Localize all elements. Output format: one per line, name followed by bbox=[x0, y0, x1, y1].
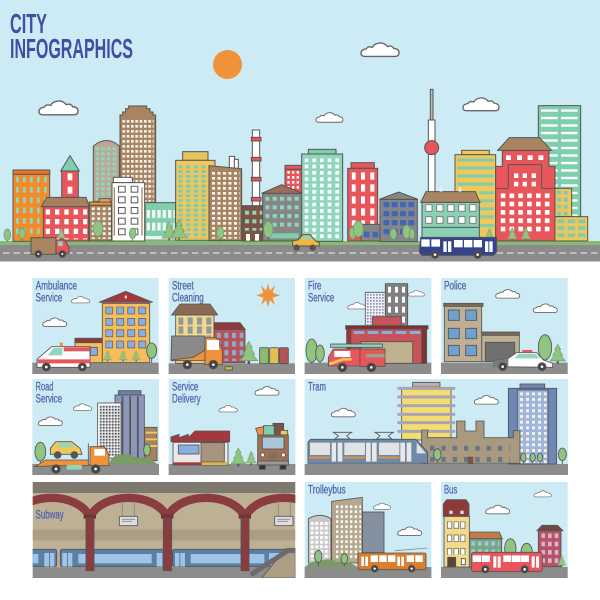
trees and pines bbox=[4, 219, 273, 242]
panel: trolleybus bbox=[305, 482, 431, 578]
bottom row panels: trolleybus and bus bbox=[305, 482, 568, 578]
heading: road service bbox=[36, 379, 62, 405]
top row panels: ambulance and street cleaning bbox=[32, 278, 295, 374]
trees bbox=[434, 448, 566, 464]
heading: bus: Bus bbox=[444, 482, 457, 496]
building: white block bbox=[112, 177, 145, 241]
building: tall brown tower bbox=[120, 106, 156, 203]
building: taupe rounded tower bbox=[93, 140, 119, 202]
clouds bbox=[331, 396, 498, 417]
panel: fire service bbox=[305, 278, 431, 374]
trees bbox=[306, 339, 324, 363]
ambulance bbox=[37, 343, 90, 371]
heading: service delivery: Service bbox=[172, 379, 198, 393]
hanging signs bbox=[119, 501, 293, 526]
pine tree bbox=[557, 555, 566, 567]
trees bbox=[538, 335, 565, 364]
delivery truck with parcels bbox=[256, 423, 288, 469]
building: clock tower bbox=[61, 156, 79, 199]
building: red narrow bbox=[348, 163, 378, 241]
blue tower bbox=[508, 384, 557, 464]
building: yellow striped bbox=[455, 150, 496, 238]
red bus bbox=[471, 552, 542, 573]
building: grey with blue windows bbox=[379, 192, 418, 242]
clouds bbox=[219, 387, 279, 412]
heading: service delivery: Delivery bbox=[172, 391, 201, 405]
red-brown building bbox=[214, 323, 245, 363]
escalator bbox=[251, 549, 295, 578]
heading: ambulance service: Ambulance bbox=[36, 278, 77, 292]
sun bbox=[213, 50, 242, 79]
building: yellow with cap bbox=[176, 152, 215, 240]
building: small yellow blocks bbox=[555, 188, 588, 241]
sun with rays bbox=[256, 283, 280, 307]
train cars bbox=[22, 549, 286, 567]
police car bbox=[493, 350, 553, 371]
police station bbox=[444, 303, 519, 362]
warehouse bbox=[171, 431, 230, 465]
clouds bbox=[373, 503, 422, 535]
skyline right half bbox=[293, 89, 588, 258]
trees and pines bbox=[349, 221, 531, 241]
building: teal with cap bbox=[302, 149, 343, 241]
heading: ambulance service bbox=[36, 278, 77, 304]
building: dark brown bbox=[242, 206, 264, 241]
skyline left half bbox=[4, 106, 305, 257]
yellow building bbox=[172, 304, 218, 363]
factory chimney bbox=[251, 130, 261, 206]
yellow office tower bbox=[399, 382, 454, 440]
building: grey with brown roof bbox=[262, 185, 302, 241]
clouds in the main sky bbox=[39, 43, 499, 122]
panel: service delivery bbox=[169, 379, 295, 475]
recycling bins bbox=[260, 348, 288, 364]
brick arches and columns bbox=[13, 498, 323, 571]
trees and bushes bbox=[35, 442, 157, 464]
top row panels: fire service and police bbox=[305, 278, 568, 374]
title bbox=[10, 8, 133, 64]
heading: tram: Tram bbox=[308, 379, 326, 393]
title: INFOGRAPHICS bbox=[10, 33, 133, 64]
building: small brown with orange top bbox=[89, 199, 111, 241]
fire truck bbox=[328, 344, 385, 372]
building: orange block bbox=[13, 170, 50, 241]
building: brown block bbox=[209, 166, 242, 241]
building: teal low block bbox=[145, 203, 176, 240]
panel: tram bbox=[305, 379, 568, 475]
towers bbox=[98, 391, 157, 461]
tram vehicle bbox=[308, 432, 428, 463]
clouds bbox=[348, 290, 424, 309]
TV tower bbox=[425, 89, 439, 193]
trees and bushes bbox=[305, 550, 357, 567]
heading: street cleaning bbox=[172, 278, 204, 304]
panel: bus bbox=[441, 482, 568, 578]
middle row panels: road service and service delivery bbox=[32, 379, 295, 475]
building: red behind grey bbox=[285, 165, 305, 194]
building: red with brown roof bbox=[41, 197, 89, 241]
heading: street cleaning: Cleaning bbox=[172, 290, 204, 304]
panel: subway bbox=[32, 482, 296, 578]
hospital bbox=[75, 291, 153, 363]
heading: road service: Service bbox=[36, 391, 62, 405]
heading: police: Police bbox=[444, 278, 466, 292]
building: red stepped with roof bbox=[496, 138, 555, 241]
main city scene background bbox=[0, 0, 600, 262]
green building bbox=[468, 532, 502, 567]
heading: fire service: Service bbox=[308, 290, 334, 304]
panel: road service bbox=[32, 379, 159, 475]
heading: fire service bbox=[308, 278, 334, 304]
building: tall teal striped bbox=[538, 106, 581, 219]
fire station bbox=[346, 317, 428, 363]
yellow narrow house bbox=[443, 500, 469, 567]
clouds bbox=[38, 404, 92, 425]
panel: police bbox=[441, 278, 568, 374]
panel: ambulance service bbox=[32, 278, 159, 374]
tow truck with car bbox=[35, 442, 109, 473]
clouds bbox=[486, 491, 551, 514]
heading: fire service: Fire bbox=[308, 278, 321, 292]
blue bus bbox=[419, 237, 497, 258]
heading: ambulance service: Service bbox=[36, 290, 62, 304]
background trees bbox=[505, 539, 532, 561]
castle bbox=[422, 421, 520, 464]
heading: street cleaning: Street bbox=[172, 278, 194, 292]
mauve building bbox=[537, 525, 563, 567]
panel: street cleaning bbox=[169, 278, 295, 374]
trees bbox=[103, 343, 157, 363]
building: grey low with blue windows bbox=[361, 224, 381, 241]
yellow car bbox=[293, 235, 319, 250]
street sweeper truck bbox=[171, 336, 232, 370]
clouds bbox=[43, 296, 90, 326]
building: teal house with brown roof bbox=[421, 187, 480, 241]
delivery truck bbox=[31, 238, 69, 257]
pine trees bbox=[231, 448, 257, 466]
heading: service delivery bbox=[172, 379, 201, 405]
chimneys behind brown block bbox=[229, 156, 238, 170]
clouds bbox=[496, 290, 557, 312]
background towers bbox=[365, 284, 408, 327]
heading: subway: Subway bbox=[36, 508, 64, 522]
title: CITY bbox=[10, 8, 47, 39]
trolleybus vehicle bbox=[358, 548, 427, 572]
pine tree bbox=[240, 341, 258, 364]
heading: trolleybus: Trolleybus bbox=[308, 482, 346, 496]
towers bbox=[308, 497, 384, 563]
heading: road service: Road bbox=[36, 379, 53, 393]
